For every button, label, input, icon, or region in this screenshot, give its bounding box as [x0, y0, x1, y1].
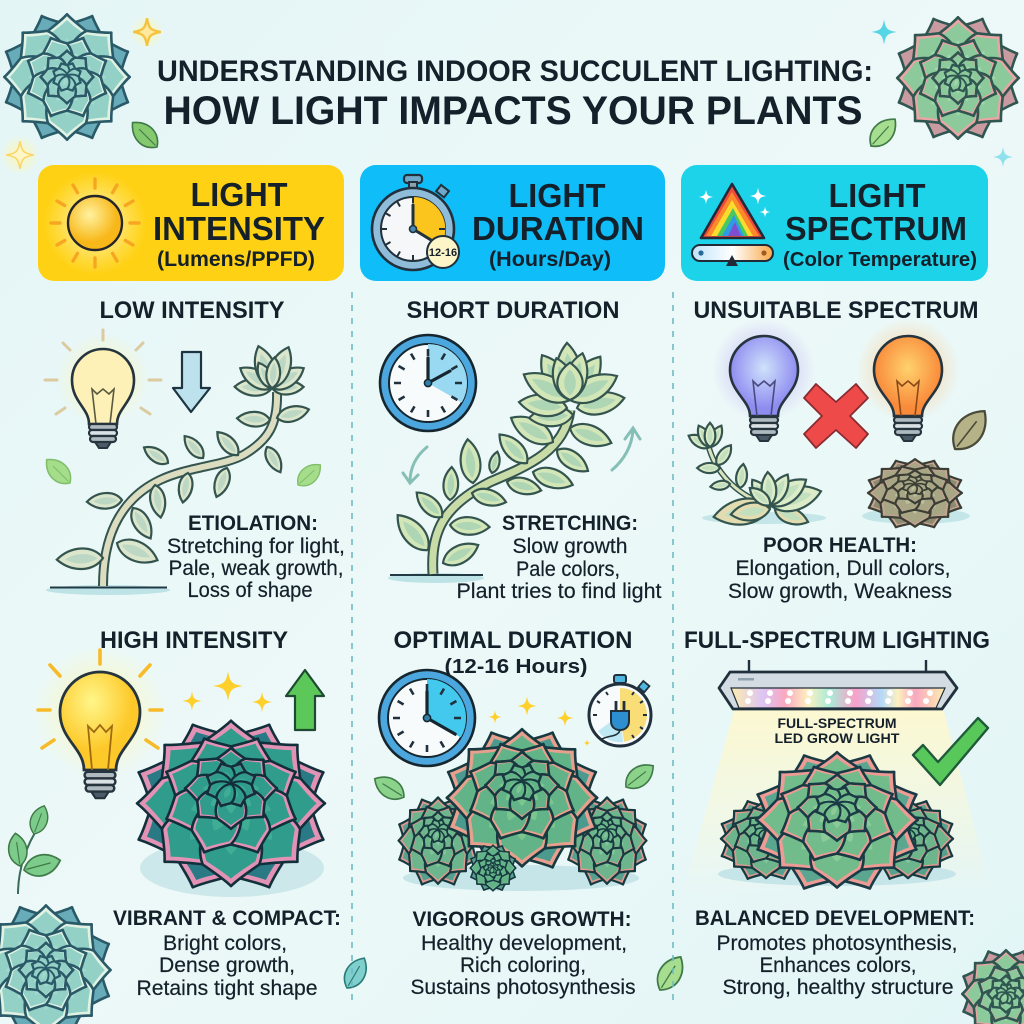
panel: unsuitable spectrum — [686, 297, 995, 603]
text: etiolation — [167, 512, 345, 602]
corner succulent: top left — [0, 8, 136, 146]
text: stretching: Pale colors, — [516, 558, 620, 581]
text: stretching: STRETCHING: — [502, 512, 638, 535]
panel: light spectrum header — [681, 165, 988, 281]
title — [157, 55, 873, 133]
panel: low intensity — [45, 297, 345, 602]
text: vigorous growth: Healthy development, — [421, 932, 627, 955]
heading: light intensity: (Lumens/PPFD) — [157, 248, 315, 271]
text: vigorous growth — [410, 908, 636, 999]
text: vibrant and compact: Retains tight shape — [136, 977, 318, 1000]
icon: sun — [43, 171, 147, 275]
illustration: rosette cluster — [394, 723, 651, 893]
icon: orange bulb — [856, 318, 960, 441]
heading: high intensity: HIGH INTENSITY — [100, 627, 288, 654]
heading: optimal duration: OPTIMAL DURATION — [394, 627, 632, 654]
heading: unsuitable spectrum: UNSUITABLE SPECTRUM — [694, 297, 978, 324]
icon: clock optimal — [379, 670, 475, 766]
panel: high intensity — [34, 627, 341, 1000]
heading: light duration: (Hours/Day) — [489, 248, 611, 271]
heading: light intensity: LIGHT — [190, 176, 288, 213]
illustration: dull rosette — [862, 456, 970, 532]
corner succulent: bottom left — [0, 899, 117, 1024]
text: vigorous growth: Sustains photosynthesis — [410, 976, 636, 999]
icon: dim bulb — [45, 330, 161, 448]
heading: full-spectrum lighting: FULL-SPECTRUM LIGHTING — [684, 627, 990, 654]
icon: clock short — [380, 335, 476, 431]
illustration: stretching plant — [388, 342, 627, 583]
icon: prism — [692, 184, 773, 266]
icon: curved arrows — [403, 428, 640, 483]
text: vibrant and compact: Dense growth, — [159, 954, 295, 977]
text: balanced development: Enhances colors, — [760, 954, 916, 977]
text: stretching: Slow growth — [512, 535, 628, 558]
heading: light duration — [472, 177, 644, 271]
text: vibrant and compact — [113, 907, 341, 1000]
corner succulent: top right — [891, 11, 1024, 145]
icon: sparkles — [488, 696, 591, 747]
text: etiolation: ETIOLATION: — [188, 512, 318, 535]
text: etiolation: Stretching for light, — [167, 535, 345, 558]
panel: short duration — [380, 297, 662, 603]
icon: wilted leaf — [945, 403, 995, 457]
icon: stopwatch — [372, 175, 459, 270]
icon: small leaves — [370, 758, 659, 805]
illustration: etiolated plant — [46, 343, 311, 595]
text: balanced development: Strong, healthy structure — [722, 976, 954, 999]
icon: bright bulb — [34, 646, 166, 798]
icon: plug timer — [589, 675, 651, 746]
illustration: balanced rosette — [716, 746, 958, 898]
label: LED grow light — [774, 715, 900, 746]
text: vigorous growth: VIGOROUS GROWTH: — [412, 908, 632, 931]
text: etiolation: Loss of shape — [188, 579, 312, 602]
icon: down arrow — [173, 352, 210, 412]
text: poor health: POOR HEALTH: — [763, 534, 917, 557]
icon: red cross — [804, 384, 868, 448]
heading: light spectrum: (Color Temperature) — [783, 249, 977, 271]
heading: short duration: SHORT DURATION — [406, 297, 620, 324]
icon: up arrow — [286, 670, 324, 730]
text: vibrant and compact: VIBRANT & COMPACT: — [113, 907, 341, 930]
title: UNDERSTANDING INDOOR SUCCULENT LIGHTING: — [157, 55, 873, 88]
text: poor health: Elongation, Dull colors, — [736, 557, 950, 580]
text: poor health: Slow growth, Weakness — [728, 580, 952, 603]
text: stretching — [456, 512, 662, 603]
illustration: vibrant rosette — [126, 714, 336, 898]
heading: light spectrum: SPECTRUM — [785, 210, 967, 247]
icon: green check — [913, 718, 988, 785]
corner succulent: bottom right — [958, 946, 1024, 1024]
panel: light intensity header — [38, 165, 344, 281]
label: LED grow light: FULL-SPECTRUM — [778, 715, 896, 731]
panel: light duration header — [360, 165, 665, 281]
heading: optimal duration: (12-16 Hours) — [444, 656, 588, 678]
illustration: leggy plant — [686, 423, 826, 529]
heading: low intensity: LOW INTENSITY — [100, 297, 284, 324]
icon: sparkles — [182, 671, 272, 712]
icon: stopwatch: 12-16 — [429, 247, 457, 259]
heading: light duration: DURATION — [472, 210, 644, 247]
light cone — [682, 708, 992, 895]
heading: light spectrum — [783, 177, 977, 271]
panel: full-spectrum lighting — [682, 627, 992, 999]
heading: light intensity — [153, 176, 325, 271]
panel: optimal duration — [370, 627, 659, 999]
icon: blue bulb — [712, 318, 816, 441]
label: LED grow light: LED GROW LIGHT — [774, 730, 900, 746]
text: stretching: Plant tries to find light — [456, 580, 662, 603]
heading: light duration: LIGHT — [508, 177, 606, 214]
text: balanced development: BALANCED DEVELOPMENT: — [695, 907, 975, 930]
title: HOW LIGHT IMPACTS YOUR PLANTS — [164, 89, 862, 133]
text: etiolation: Pale, weak growth, — [168, 557, 344, 580]
text: vibrant and compact: Bright colors, — [163, 932, 287, 955]
text: balanced development: Promotes photosynthesis, — [716, 932, 958, 955]
text: poor health — [728, 534, 952, 603]
heading: light intensity: INTENSITY — [153, 210, 325, 247]
text: vigorous growth: Rich coloring, — [460, 954, 586, 977]
heading: light spectrum: LIGHT — [828, 177, 926, 214]
text: balanced development — [695, 907, 975, 999]
icon: LED grow light — [719, 660, 957, 709]
heading: optimal duration — [394, 627, 632, 678]
